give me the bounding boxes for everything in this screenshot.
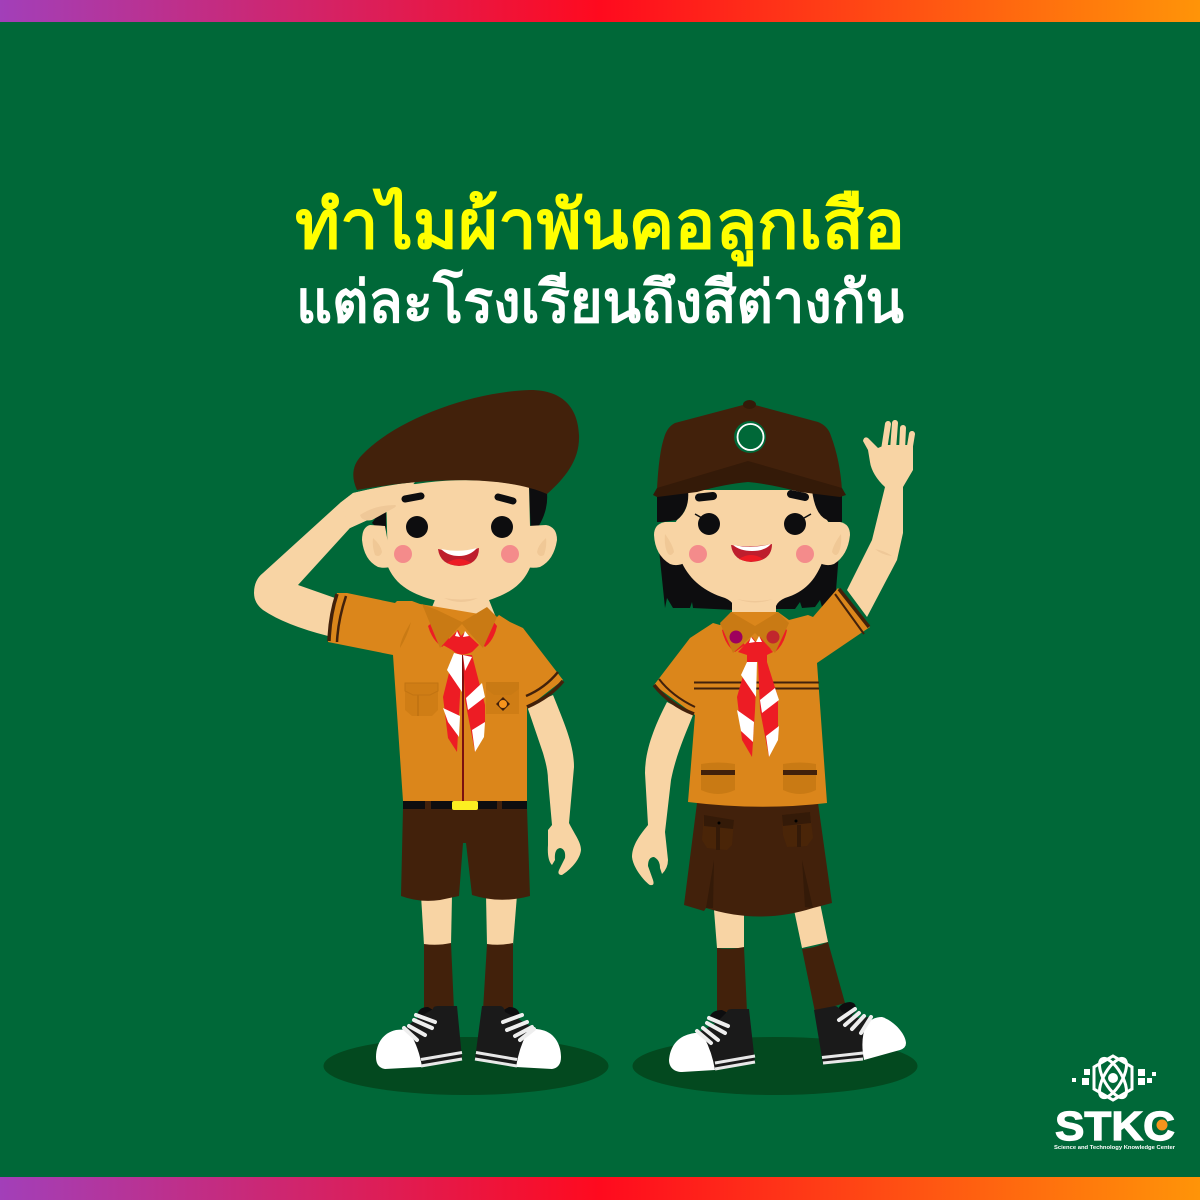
boy legs	[421, 895, 517, 1010]
boy right shoe	[475, 1006, 561, 1069]
cap button	[743, 400, 756, 409]
boy rank badge	[496, 697, 510, 711]
girl scarf	[737, 636, 779, 757]
boy belt	[403, 801, 527, 810]
boy right arm and hand	[527, 695, 581, 875]
title line 2: แต่ละโรงเรียนถึงสีต่างกัน	[296, 267, 904, 335]
girl scout character	[632, 400, 913, 1072]
girl left shoe	[669, 1009, 755, 1072]
boy shorts	[401, 808, 530, 901]
boy neck	[430, 595, 495, 628]
girl sleeve cuffs	[654, 589, 869, 714]
logo wordmark: STKC	[1055, 1103, 1175, 1149]
boy ears	[362, 525, 557, 568]
boy scout character	[254, 390, 581, 1069]
boy saluting hand	[340, 484, 415, 528]
STKC logo	[1054, 1054, 1176, 1151]
girl left arm and hand	[632, 702, 693, 885]
boy shirt fold	[400, 622, 411, 648]
girl face	[672, 490, 832, 609]
boy finger shadow	[360, 505, 396, 520]
bottom gradient bar	[0, 1177, 1200, 1200]
boy left shoe	[376, 1006, 462, 1069]
boy face	[386, 480, 531, 603]
ground shadow: girl	[632, 1037, 918, 1095]
boy beret	[353, 390, 579, 494]
top gradient bar	[0, 0, 1200, 22]
boy saluting arm	[254, 482, 415, 636]
boy placket line	[462, 655, 464, 801]
girl shirt	[654, 588, 870, 807]
ground shadow: boy	[324, 1037, 608, 1095]
girl chest stripes	[694, 682, 819, 688]
girl cap	[653, 400, 846, 497]
girl legs	[714, 903, 845, 1012]
girl hair	[657, 490, 842, 610]
logo orange dot	[1156, 1120, 1168, 1130]
boy eyebrows	[405, 496, 513, 501]
girl right shoe	[814, 1002, 906, 1064]
boy collar	[422, 604, 497, 648]
girl raised arm	[847, 423, 913, 617]
girl scarf back ring	[722, 625, 787, 652]
boy hair	[372, 487, 547, 537]
girl skirt pleats	[706, 860, 813, 908]
boy chin shadow	[444, 598, 478, 602]
boy shirt	[328, 593, 563, 801]
boy eyes	[406, 516, 513, 538]
girl chin shadow	[737, 599, 773, 602]
boy mouth	[438, 548, 479, 566]
girl ears	[654, 522, 850, 565]
boy belt buckle	[452, 801, 478, 810]
girl collar pins	[730, 630, 780, 644]
girl collar	[720, 612, 789, 653]
girl mouth	[731, 544, 772, 562]
cap badge	[734, 421, 766, 453]
boy shirt pockets	[405, 682, 519, 716]
girl arm crease	[875, 549, 892, 556]
girl skirt pockets	[702, 812, 813, 850]
title	[295, 186, 905, 335]
boy scarf back ring	[428, 620, 497, 647]
girl neck	[732, 595, 776, 628]
title line 1: ทำไมผ้าพันคอลูกเสือ	[295, 186, 905, 267]
logo atom icon	[1094, 1054, 1132, 1102]
boy cheeks	[394, 545, 519, 563]
logo pixel squares	[1072, 1069, 1156, 1085]
girl skirt	[684, 803, 832, 916]
girl shirt pockets	[701, 762, 817, 794]
girl cheeks	[689, 545, 814, 563]
boy sleeve cuffs	[329, 594, 563, 707]
girl eyes	[695, 513, 811, 535]
logo tagline: Science and Technology Knowledge Center	[1054, 1145, 1176, 1151]
boy scarf	[443, 630, 485, 752]
girl eyebrows	[699, 494, 805, 498]
